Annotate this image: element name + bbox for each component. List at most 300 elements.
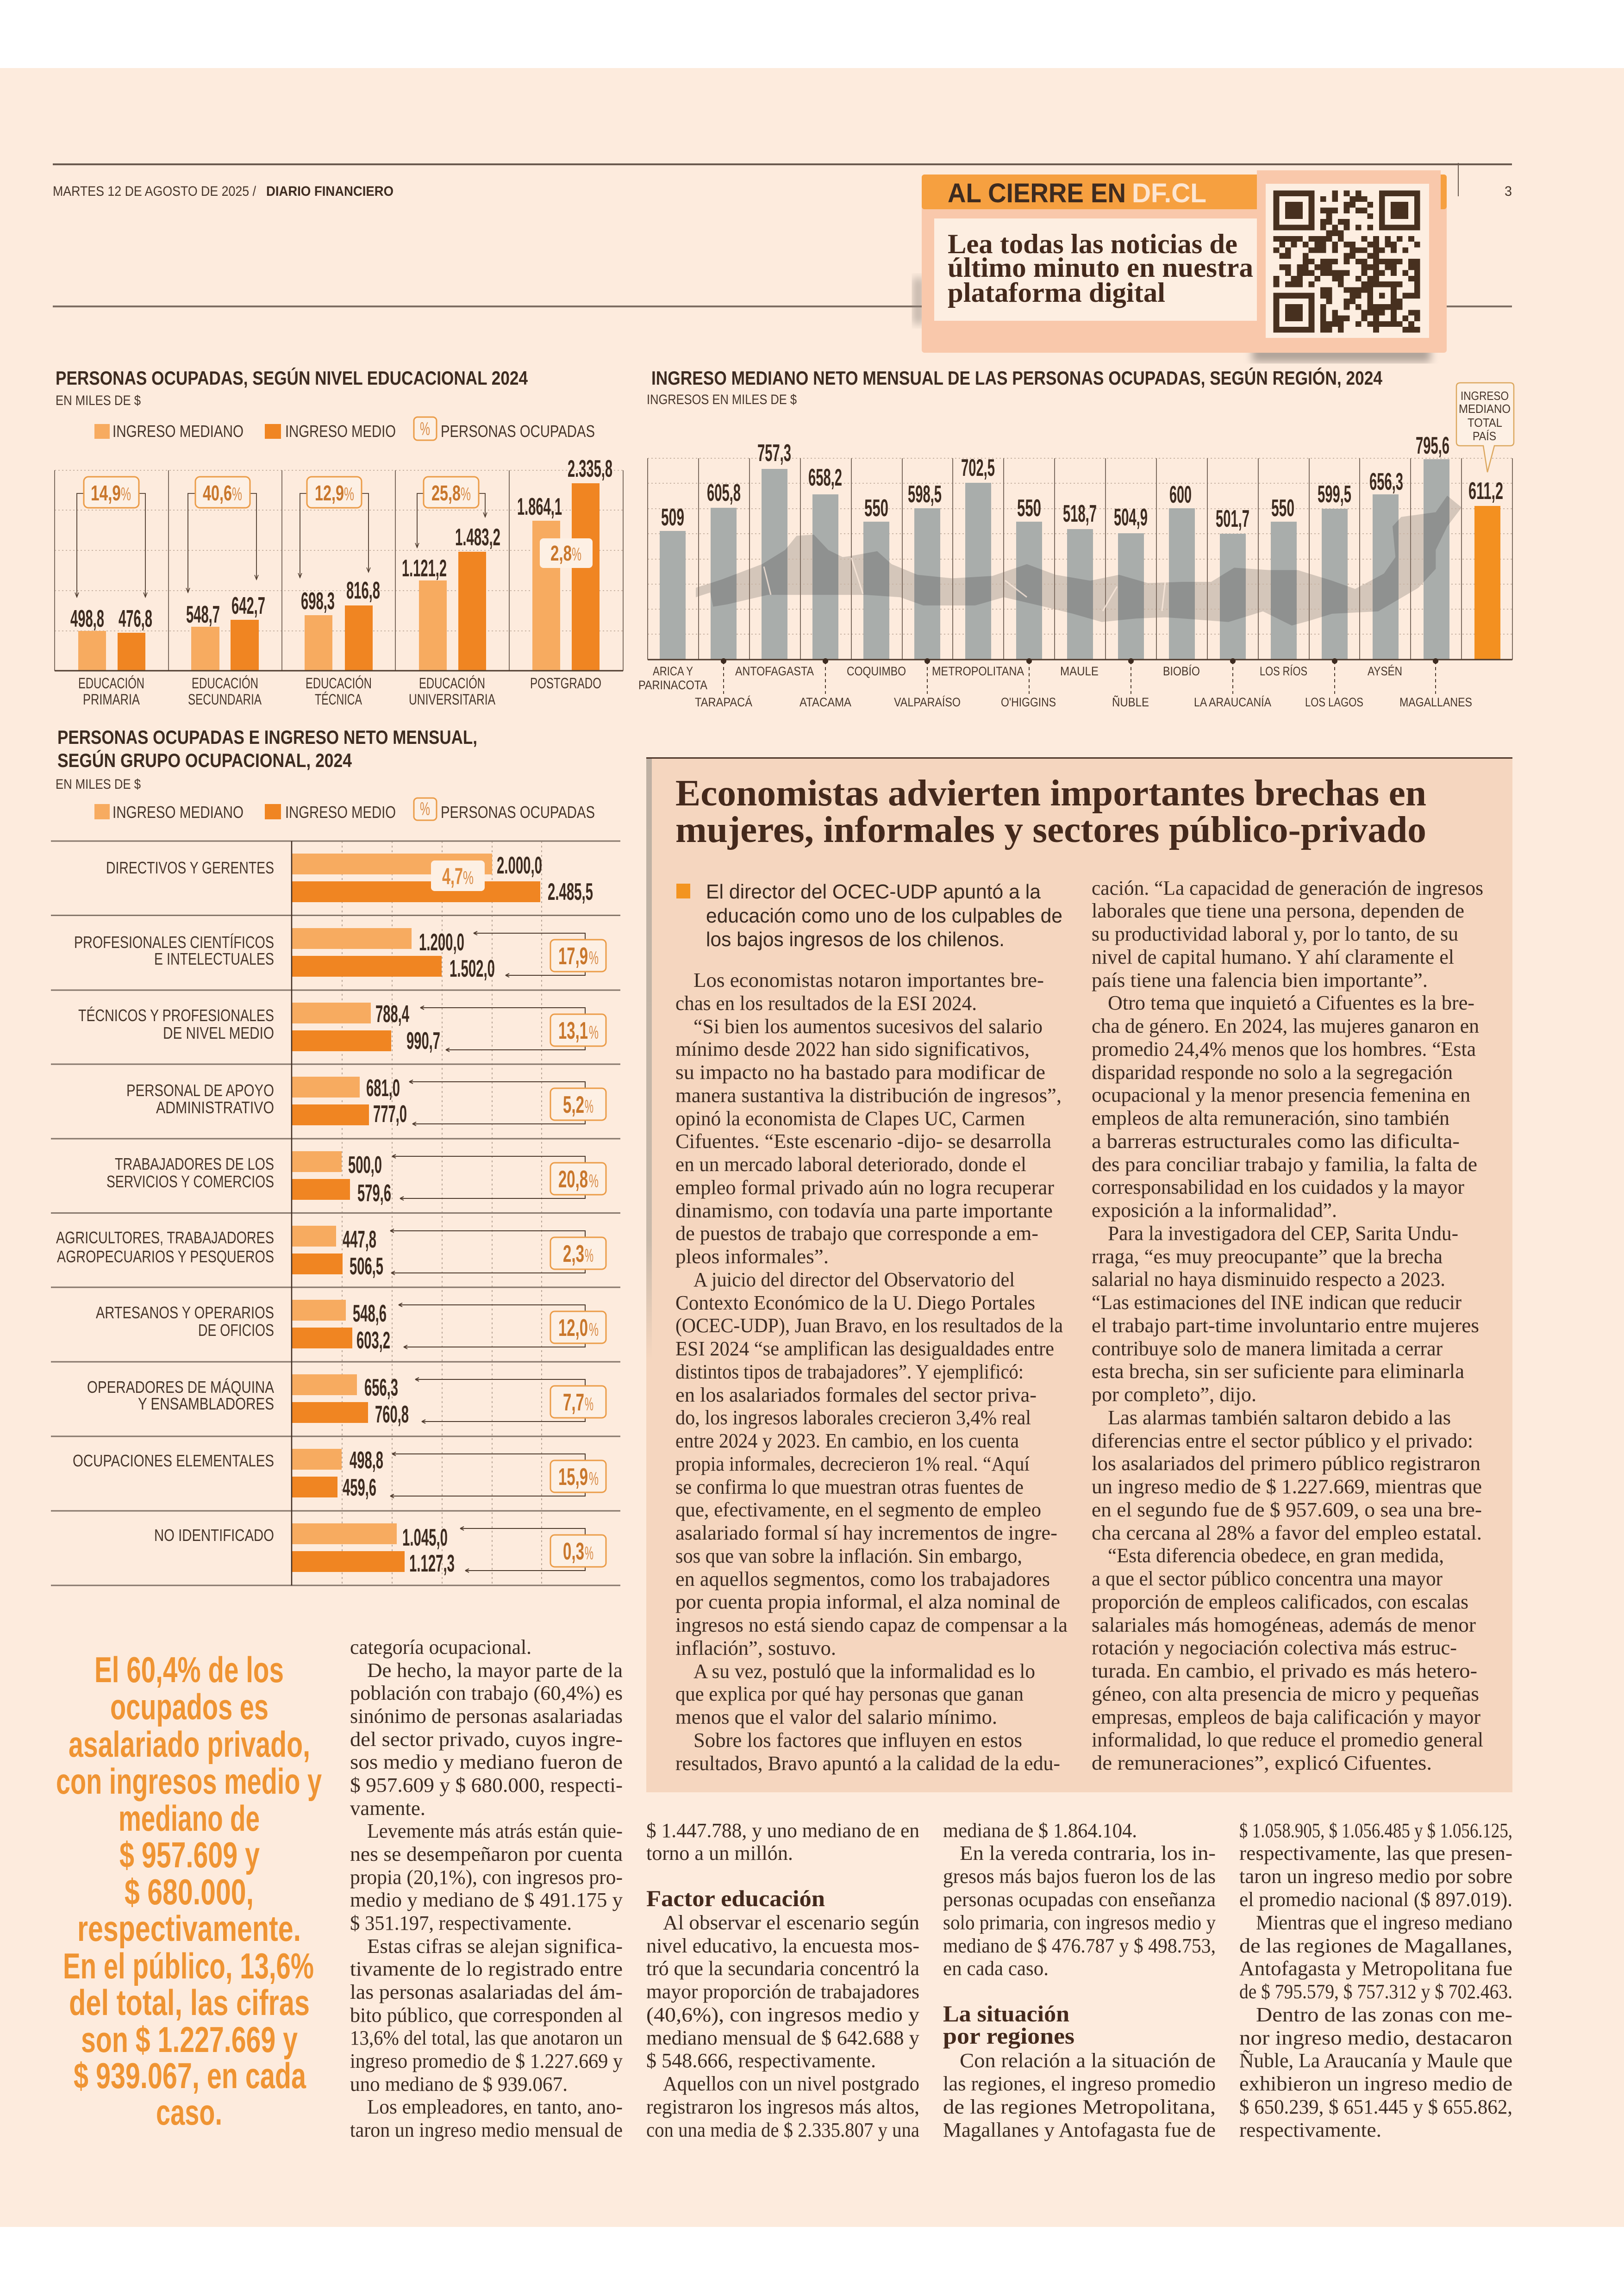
article text column 1: mínimo desde 2022 han sido significativos, [675, 1038, 1030, 1060]
pull quote: son $ 1.227.669 y [81, 2019, 298, 2060]
body text column A: factor educación: torno a un millón. [646, 1842, 793, 1865]
value labels: 702,5 [961, 455, 995, 481]
article text column 1: ingresos no está siendo capaz de compensar a la [675, 1614, 1068, 1636]
legend [94, 417, 595, 441]
value labels: 658,2 [808, 464, 842, 491]
article text column 2: Otro tema que inquietó a Cifuentes es la bre- [1108, 992, 1474, 1014]
row: técnicos y profesionales: 13,1 [558, 1017, 588, 1044]
row: técnicos y profesionales: DE NIVEL MEDIO [163, 1023, 274, 1042]
page header: 3 [1505, 184, 1512, 199]
article text column 2: de remuneraciones”, explicó Cifuentes. [1092, 1752, 1432, 1774]
article text column 2: “Las estimaciones del INE indican que reducir [1092, 1291, 1462, 1314]
article text column 2: el trabajo part-time involuntario entre mujeres [1092, 1314, 1479, 1337]
row: trabajadores de servicios y comercios: TRABAJADORES DE LOS [115, 1154, 274, 1173]
chart title: PERSONAS OCUPADAS, SEGÚN NIVEL EDUCACIONAL 2024 [56, 367, 528, 389]
body text column C: Dentro de las zonas con me- [1256, 2003, 1512, 2026]
article text column 1: Contexto Económico de la U. Diego Portales [675, 1291, 1035, 1314]
percentage badges: % [572, 544, 581, 565]
bars: educación técnica: 816,8 [346, 577, 380, 604]
row: operadores: 656,3 [364, 1374, 398, 1401]
row: directivos y gerentes: 2.000,0 [497, 852, 542, 879]
chart subtitle: EN MILES DE $ [56, 393, 141, 408]
article text column 1: entre 2024 y 2023. En cambio, en los cuenta [675, 1429, 1019, 1452]
article text column 2: laborales que tiene una persona, dependen de [1092, 899, 1464, 922]
article headline: Economistas advierten importantes brechas en [675, 773, 1426, 814]
row: técnicos y profesionales: TÉCNICOS Y PROFESIONALES [78, 1006, 274, 1025]
map of Chile silhouette [696, 496, 1462, 625]
article text column 2: a barreras estructurales como las dificulta- [1092, 1130, 1460, 1153]
body text column: categoría ocupacional: medio y mediano de $ 491.175 y [350, 1889, 623, 1911]
row: agricultores: AGROPECUARIOS Y PESQUEROS [57, 1247, 274, 1266]
legend: INGRESO MEDIANO [112, 422, 244, 441]
row: artesanos: 12,0 [558, 1315, 588, 1341]
row: artesanos: % [589, 1320, 599, 1340]
article text column 1: distintos tipos de trabajadores”. Y ejemplificó: [675, 1360, 1024, 1383]
article text column 1: de puestos de trabajo que corresponde a em- [675, 1222, 1038, 1245]
legend [94, 798, 595, 822]
row: personal de apoyo administrativo [126, 1075, 606, 1128]
pull quote: $ 939.067, en cada [74, 2055, 306, 2096]
body text column B: la situación por regiones: Magallanes y Antofagasta fue de [943, 2119, 1216, 2141]
article text column 1: que, efectivamente, en el segmento de empleo [675, 1498, 1041, 1521]
body text column A: factor educación: Aquellos con un nivel postgrado [663, 2072, 919, 2095]
chart panel: personas ocupadas según nivel educacional [55, 367, 623, 708]
chart panel: personas ocupadas e ingreso por grupo ocupacional [51, 726, 620, 1585]
region bars [660, 459, 1500, 660]
article text column 1: que explica por qué hay personas que ganan [675, 1683, 1024, 1705]
chart subtitle: EN MILES DE $ [56, 777, 141, 792]
value labels: 504,9 [1114, 504, 1148, 531]
article text column 1: (OCEC-UDP), Juan Bravo, en los resultados de la [675, 1314, 1063, 1337]
row: agricultores: 447,8 [343, 1226, 376, 1253]
body text column B: la situación por regiones: gresos más bajos fueron los de las [943, 1865, 1216, 1888]
article text column 1: A su vez, postuló que la informalidad es lo [693, 1660, 1035, 1683]
bars: educación universitaria [402, 524, 500, 671]
bars: postgrado: 1.864,1 [517, 493, 562, 520]
region labels: ÑUBLE [1112, 695, 1149, 709]
article text column 2: en el segundo fue de $ 957.609, o sea una bre- [1092, 1498, 1482, 1521]
percentage badges: % [121, 484, 131, 505]
category labels: POSTGRADO [530, 675, 601, 692]
percentage badges: % [461, 484, 471, 505]
body text column C: de $ 795.579, $ 757.312 y $ 702.463. [1239, 1980, 1512, 2003]
callout: ingreso mediano total país: MEDIANO [1459, 402, 1511, 416]
article text column 2: contribuye solo de manera limitada a cerrar [1092, 1337, 1443, 1360]
region labels: AYSÉN [1368, 664, 1402, 678]
pull quote: con ingresos medio y [56, 1761, 322, 1802]
body text column: categoría ocupacional: uno mediano de $ 939.067. [350, 2073, 568, 2095]
article text column 1: opinó la economista de Clapes UC, Carmen [675, 1107, 1025, 1130]
region labels: BIOBÍO [1163, 664, 1200, 678]
value labels: 501,7 [1216, 505, 1249, 532]
subheading: la situación por regiones [943, 2001, 1074, 2049]
article text column 2 [1092, 877, 1483, 1774]
pull quote: mediano de [119, 1798, 260, 1839]
body text column: categoría ocupacional: Levemente más atrás están quie- [367, 1820, 623, 1842]
body text column C: $ 650.239, $ 651.445 y $ 655.862, [1239, 2095, 1512, 2118]
body text column: categoría ocupacional: ingreso promedio de $ 1.227.669 y [350, 2050, 623, 2072]
article text column 2: exposición a la informalidad”. [1092, 1199, 1337, 1222]
article text column 2: turada. En cambio, el privado es más hetero- [1092, 1659, 1477, 1682]
row: artesanos: ARTESANOS Y OPERARIOS [96, 1303, 274, 1322]
region connectors [721, 658, 1438, 694]
article text column 1: empleo formal privado aún no logra recuperar [675, 1176, 1054, 1199]
region labels: TARAPACÁ [695, 695, 752, 709]
promo text: último minuto en nuestra [948, 252, 1253, 283]
article text column 1: por cuenta propia informal, el alza nominal de [675, 1590, 1060, 1613]
region labels: O'HIGGINS [1001, 695, 1056, 709]
article text column 1: en un mercado laboral deteriorado, donde el [675, 1153, 1026, 1176]
row: profesionales científicos: PROFESIONALES CIENTÍFICOS [74, 933, 274, 952]
region labels: LA ARAUCANÍA [1194, 695, 1271, 709]
article text column 1: manera sustantiva la distribución de ingresos”, [675, 1084, 1062, 1107]
article text column 2: a que el sector público concentra una mayor [1092, 1567, 1443, 1590]
article text column 1: propia informales, decrecieron 1% real. “Aquí [675, 1453, 1030, 1475]
row: técnicos y profesionales: 788,4 [375, 1001, 409, 1028]
article text column 1: inflación”, sostuvo. [675, 1637, 836, 1659]
body text column: categoría ocupacional [350, 1636, 623, 2141]
body text column C: Ñuble, La Araucanía y Maule que [1239, 2049, 1512, 2072]
article deck [676, 880, 1062, 951]
article deck: educación como uno de los culpables de [706, 904, 1062, 927]
body text column A: factor educación: registraron los ingresos más altos, [646, 2095, 919, 2118]
bars: educación técnica [301, 577, 380, 671]
row: personal de apoyo administrativo: % [585, 1097, 593, 1117]
region labels [638, 664, 1472, 709]
percentage badges: 2,8 [550, 541, 572, 565]
percentage badges: 25,8 [431, 481, 461, 505]
bars: postgrado: 2.335,8 [568, 455, 612, 482]
row: personal de apoyo administrativo: 777,0 [373, 1101, 407, 1128]
body text column B: la situación por regiones: en cada caso. [943, 1957, 1049, 1980]
article text column 2: esta brecha, sin ser suficiente para eliminarla [1092, 1360, 1464, 1383]
region labels: METROPOLITANA [932, 664, 1024, 678]
article headline [675, 773, 1426, 850]
article headline: mujeres, informales y sectores público-privado [675, 810, 1426, 850]
chart title: INGRESO MEDIANO NETO MENSUAL DE LAS PERSONAS OCUPADAS, SEGÚN REGIÓN, 2024 [651, 367, 1383, 389]
body text column A: factor educación: $ 548.666, respectivamente. [646, 2049, 876, 2072]
value labels: 795,6 [1416, 432, 1449, 459]
row: directivos y gerentes: DIRECTIVOS Y GERENTES [106, 858, 274, 877]
article text column 1: chas en los resultados de la ESI 2024. [675, 992, 977, 1015]
article text column 1: se confirma lo que muestran otras fuentes de [675, 1476, 1024, 1498]
body text column C: exhibieron un ingreso medio de [1239, 2072, 1512, 2095]
callout: ingreso mediano total país [1456, 383, 1514, 472]
value labels: 599,5 [1318, 481, 1351, 508]
body text column B: la situación por regiones: solo primaria, con ingresos medio y [943, 1911, 1216, 1934]
article text column 2: salarial no haya disminuido respecto a 2023. [1092, 1268, 1445, 1291]
row: operadores: OPERADORES DE MÁQUINA [87, 1378, 274, 1397]
article text column 2: Las alarmas también saltaron debido a las [1108, 1406, 1451, 1429]
chart title [57, 726, 477, 771]
category labels: EDUCACIÓN [419, 675, 485, 692]
article text column 2: su productividad laboral y, por lo tanto, de su [1092, 923, 1458, 945]
chart subtitle: INGRESOS EN MILES DE $ [647, 392, 797, 407]
body text column: categoría ocupacional: las personas asalariadas del ám- [350, 1981, 623, 2003]
article text column 2: “Esta diferencia obedece, en gran medida, [1108, 1544, 1444, 1567]
row: artesanos: DE OFICIOS [198, 1321, 274, 1340]
category labels: TÉCNICA [315, 691, 362, 708]
pull quote: En el público, 13,6% [63, 1946, 314, 1986]
article text column 1: asalariado formal sí hay incrementos de ingre- [675, 1522, 1057, 1544]
row: técnicos y profesionales: % [589, 1023, 599, 1043]
percentage badges: 12,9 [315, 481, 344, 505]
legend: INGRESO MEDIANO [112, 803, 244, 822]
article text column 1: Los economistas notaron importantes bre- [693, 969, 1044, 992]
value labels: 656,3 [1369, 468, 1403, 495]
row: trabajadores de servicios y comercios: 20,8 [558, 1166, 588, 1193]
article text column 2: promedio 24,4% menos que los hombres. “Esta [1092, 1038, 1476, 1060]
region labels: ANTOFAGASTA [735, 664, 814, 678]
category labels: SECUNDARIA [188, 691, 262, 708]
percentage badges: % [232, 484, 242, 505]
body text column: categoría ocupacional: taron un ingreso medio mensual de [350, 2119, 623, 2141]
row: ocupaciones elementales: 498,8 [350, 1447, 383, 1474]
article text column 2: proporción de empleos calificados, con escalas [1092, 1590, 1468, 1613]
pull quote: $ 957.609 y [119, 1834, 260, 1875]
bars: educación primaria: 498,8 [70, 605, 104, 632]
body text column C: taron un ingreso medio por sobre [1239, 1865, 1512, 1888]
article text column 2: un ingreso medio de $ 1.227.669, mientras que [1092, 1475, 1482, 1498]
body text column: categoría ocupacional: sos medio y mediano fueron de [350, 1751, 623, 1773]
subheading: la situación por regiones: por regiones [943, 2023, 1074, 2049]
row: trabajadores de servicios y comercios [106, 1151, 606, 1207]
bars: educación primaria [70, 605, 152, 671]
body text column C [1239, 1819, 1512, 2141]
article text column 2: los asalariados del primero público registraron [1092, 1452, 1480, 1475]
body text column C: $ 1.058.905, $ 1.056.485 y $ 1.056.125, [1239, 1819, 1512, 1842]
row: profesionales científicos: 1.502,0 [450, 955, 495, 982]
row: técnicos y profesionales: 990,7 [406, 1028, 440, 1054]
value labels: 550 [864, 495, 888, 522]
body text column A: factor educación: Al observar el escenario según [663, 1911, 919, 1934]
pull quote: ocupados es [110, 1686, 269, 1727]
article text column 2: géneo, con alta presencia de micro y pequeñas [1092, 1683, 1479, 1705]
grid and row rules [51, 841, 620, 1585]
category labels: EDUCACIÓN [78, 675, 144, 692]
article text column 2: por completo”, dijo. [1092, 1383, 1256, 1406]
row: profesionales científicos: 17,9 [558, 943, 588, 970]
row: profesionales científicos: 1.200,0 [419, 929, 464, 956]
body text column: categoría ocupacional: nes se desempeñaron por cuenta [350, 1843, 623, 1865]
value labels: 550 [1017, 495, 1041, 522]
percentage badges: % [344, 484, 354, 505]
article text column 2: empleos de alta remuneración, sino también [1092, 1107, 1449, 1129]
subheading: factor educación: Factor educación [646, 1885, 825, 1911]
body text column C: Mientras que el ingreso mediano [1256, 1911, 1512, 1934]
value labels: 605,8 [707, 480, 741, 506]
row: operadores: Y ENSAMBLADORES [138, 1394, 274, 1413]
legend: % [420, 419, 430, 439]
article text column 1: menos que el valor del salario mínimo. [675, 1706, 997, 1728]
body text column: categoría ocupacional: categoría ocupacional. [350, 1636, 531, 1659]
article text column 2: informalidad, lo que reduce el promedio general [1092, 1728, 1483, 1751]
row: ocupaciones elementales: % [589, 1469, 599, 1489]
body text column B: la situación por regiones [943, 1819, 1216, 2141]
body text column: categoría ocupacional: tivamente de lo registrado entre [350, 1958, 623, 1980]
body text column: categoría ocupacional: 13,6% del total, las que anotaron un [350, 2027, 623, 2049]
article text column 1 [675, 969, 1068, 1775]
body text column: categoría ocupacional: sinónimo de personas asalariadas [350, 1705, 623, 1727]
body text column C: Antofagasta y Metropolitana fue [1239, 1957, 1512, 1980]
row: no identificado [154, 1523, 606, 1577]
value labels: 757,3 [757, 440, 791, 467]
callout: ingreso mediano total país: PAÍS [1473, 429, 1496, 443]
value labels: 509 [661, 504, 684, 531]
article text column 1: Sobre los factores que influyen en estos [693, 1729, 1022, 1752]
region labels: COQUIMBO [847, 664, 906, 678]
row: ocupaciones elementales: 15,9 [558, 1464, 588, 1491]
row: trabajadores de servicios y comercios: SERVICIOS Y COMERCIOS [106, 1172, 274, 1191]
article text column 2: rotación y negociación colectiva más estruc- [1092, 1636, 1457, 1659]
article deck: El director del OCEC-UDP apuntó a la [706, 880, 1041, 903]
map inner borders [764, 558, 1165, 611]
row: agricultores: 2,3 [563, 1241, 584, 1267]
pull quote [56, 1649, 322, 2133]
article text column 1: su impacto no ha bastado para modificar de [675, 1061, 1045, 1084]
callout: ingreso mediano total país: TOTAL [1468, 416, 1502, 430]
category labels: EDUCACIÓN [192, 675, 258, 692]
bars: educación universitaria: 1.483,2 [455, 524, 500, 551]
promo box: al cierre en DF.CL [913, 170, 1447, 362]
row: personal de apoyo administrativo: PERSONAL DE APOYO [126, 1081, 274, 1100]
bars: educación primaria: 476,8 [119, 605, 152, 632]
article text column 2: diferencias entre el sector público y el privado: [1092, 1429, 1473, 1452]
row: no identificado: 1.127,3 [409, 1550, 455, 1577]
body text column A: factor educación: mayor proporción de trabajadores [646, 1980, 919, 2003]
article text column 2: des para conciliar trabajo y familia, la falta de [1092, 1153, 1477, 1176]
body text column: categoría ocupacional: De hecho, la mayor parte de la [367, 1659, 623, 1682]
page header: MARTES 12 DE AGOSTO DE 2025 / [53, 184, 256, 199]
bars: educación secundaria: 642,7 [231, 592, 265, 619]
row: no identificado: 0,3 [563, 1538, 584, 1565]
bars: educación universitaria: 1.121,2 [402, 555, 447, 582]
row: directivos y gerentes [106, 852, 593, 905]
chart title: SEGÚN GRUPO OCUPACIONAL, 2024 [57, 749, 352, 771]
category labels: EDUCACIÓN [306, 675, 372, 692]
article text column 2: corresponsabilidad en los cuidados y la mayor [1092, 1176, 1464, 1198]
article text column 1: “Si bien los aumentos sucesivos del salario [693, 1015, 1043, 1038]
article text column 1: en los asalariados formales del sector priva- [675, 1384, 1037, 1406]
body text column: categoría ocupacional: Los empleadores, en tanto, ano- [367, 2095, 623, 2118]
row: no identificado: % [585, 1543, 593, 1564]
body text column A: factor educación [646, 1819, 919, 2141]
percentage badges: 14,9 [91, 481, 121, 505]
row: personal de apoyo administrativo: ADMINISTRATIVO [156, 1098, 274, 1117]
row: profesionales científicos: % [589, 948, 599, 968]
article text column 1: do, los ingresos laborales crecieron 3,4% real [675, 1406, 1031, 1429]
article text column 2: empresas, empleos de baja calificación y mayor [1092, 1706, 1480, 1728]
pull quote: $ 680.000, [125, 1871, 254, 1912]
promo heading: DF.CL [1132, 178, 1206, 208]
region labels: LOS RÍOS [1260, 664, 1307, 678]
article text column 1: Cifuentes. “Este escenario -dijo- se desarrolla [675, 1130, 1051, 1153]
body text column: categoría ocupacional: $ 957.609 y $ 680.000, respecti- [350, 1774, 623, 1796]
row: agricultores: 506,5 [350, 1253, 383, 1280]
row: operadores: % [585, 1394, 593, 1415]
row: no identificado: NO IDENTIFICADO [154, 1526, 274, 1545]
body text column A: factor educación: $ 1.447.788, y uno mediano de en [646, 1819, 919, 1842]
map over bars [696, 496, 1462, 625]
row: agricultores: AGRICULTORES, TRABAJADORES [56, 1228, 274, 1247]
grid [55, 470, 623, 671]
article text column 1: ESI 2024 “se amplifican las desigualdades entre [675, 1337, 1054, 1360]
row: técnicos y profesionales [78, 1001, 606, 1054]
article text column 2: cha de género. En 2024, las mujeres ganaron en [1092, 1015, 1479, 1037]
row: profesionales científicos [74, 928, 606, 982]
article text column 2: país tiene una falencia bien importante”. [1092, 969, 1428, 992]
row: personal de apoyo administrativo: 681,0 [366, 1075, 400, 1102]
region labels: LOS LAGOS [1305, 695, 1363, 709]
legend: PERSONAS OCUPADAS [441, 422, 595, 441]
category labels [78, 675, 601, 708]
article text column 2: rraga, “es muy preocupante” que la brecha [1092, 1245, 1443, 1268]
bars: educación secundaria [186, 592, 265, 671]
legend: PERSONAS OCUPADAS [441, 803, 595, 822]
article text column 2: ocupacional y la menor presencia femenina en [1092, 1084, 1470, 1106]
grid [648, 458, 1512, 660]
region labels: ARICA Y [653, 664, 693, 678]
value labels: 611,2 [1468, 478, 1503, 505]
body text column: categoría ocupacional: propia (20,1%), con ingresos pro- [350, 1866, 623, 1889]
body text column: categoría ocupacional: bito público, que corresponden al [350, 2004, 623, 2027]
row: ocupaciones elementales [73, 1447, 606, 1501]
pull quote: El 60,4% de los [94, 1649, 284, 1690]
row: directivos y gerentes: 4,7 [442, 863, 463, 889]
row: ocupaciones elementales: OCUPACIONES ELEMENTALES [73, 1451, 274, 1470]
article text column 1: resultados, Bravo apuntó a la calidad de la edu- [675, 1752, 1060, 1775]
promo heading: AL CIERRE EN [948, 178, 1126, 208]
bars: educación técnica: 698,3 [301, 588, 335, 615]
category labels: PRIMARIA [83, 691, 140, 708]
body text column: categoría ocupacional: del sector privado, cuyos ingre- [350, 1728, 623, 1751]
article text column 2: Para la investigadora del CEP, Sarita Undu- [1108, 1222, 1458, 1245]
article text column 2: nivel de capital humano. Y ahí claramente el [1092, 946, 1454, 968]
page header: DIARIO FINANCIERO [266, 184, 394, 199]
row: artesanos [96, 1300, 606, 1354]
promo text: plataforma digital [948, 277, 1165, 308]
row: agricultores: % [585, 1246, 593, 1266]
body text column C: respectivamente, las que presen- [1239, 1842, 1512, 1865]
value labels [661, 432, 1503, 532]
body text column: categoría ocupacional: población con trabajo (60,4%) es [350, 1682, 623, 1704]
region labels: VALPARAÍSO [894, 695, 961, 709]
panel: article box economistas [646, 757, 1512, 1792]
body text column C: el promedio nacional ($ 897.019). [1239, 1888, 1512, 1911]
percentage badges: 40,6 [203, 481, 232, 505]
arrows [77, 493, 485, 597]
pull quote: respectivamente. [77, 1908, 301, 1949]
pull quote: asalariado privado, [69, 1724, 310, 1765]
body text column A: factor educación: nivel educativo, la encuesta mos- [646, 1934, 919, 1957]
body text column A: factor educación: mediano mensual de $ 642.688 y [646, 2027, 919, 2049]
body text column: categoría ocupacional: Estas cifras se alejan significa- [367, 1935, 623, 1958]
body text column B: la situación por regiones: Con relación a la situación de [960, 2049, 1216, 2072]
legend: % [420, 799, 430, 819]
row: no identificado: 1.045,0 [402, 1524, 448, 1551]
row: directivos y gerentes: 2.485,5 [548, 879, 593, 905]
region labels: MAULE [1060, 664, 1099, 678]
body text column B: la situación por regiones: En la vereda contraria, los in- [960, 1842, 1216, 1865]
row: ocupaciones elementales: 459,6 [343, 1474, 376, 1501]
body text column: categoría ocupacional: vamente. [350, 1797, 425, 1820]
region labels: ATACAMA [800, 695, 851, 709]
row: operadores [87, 1374, 606, 1428]
row: operadores: 760,8 [375, 1401, 409, 1428]
row: operadores: 7,7 [563, 1389, 584, 1416]
row: profesionales científicos: E INTELECTUALES [154, 949, 274, 968]
article text column 1: en aquellos segmentos, como los trabajadores [675, 1568, 1050, 1590]
